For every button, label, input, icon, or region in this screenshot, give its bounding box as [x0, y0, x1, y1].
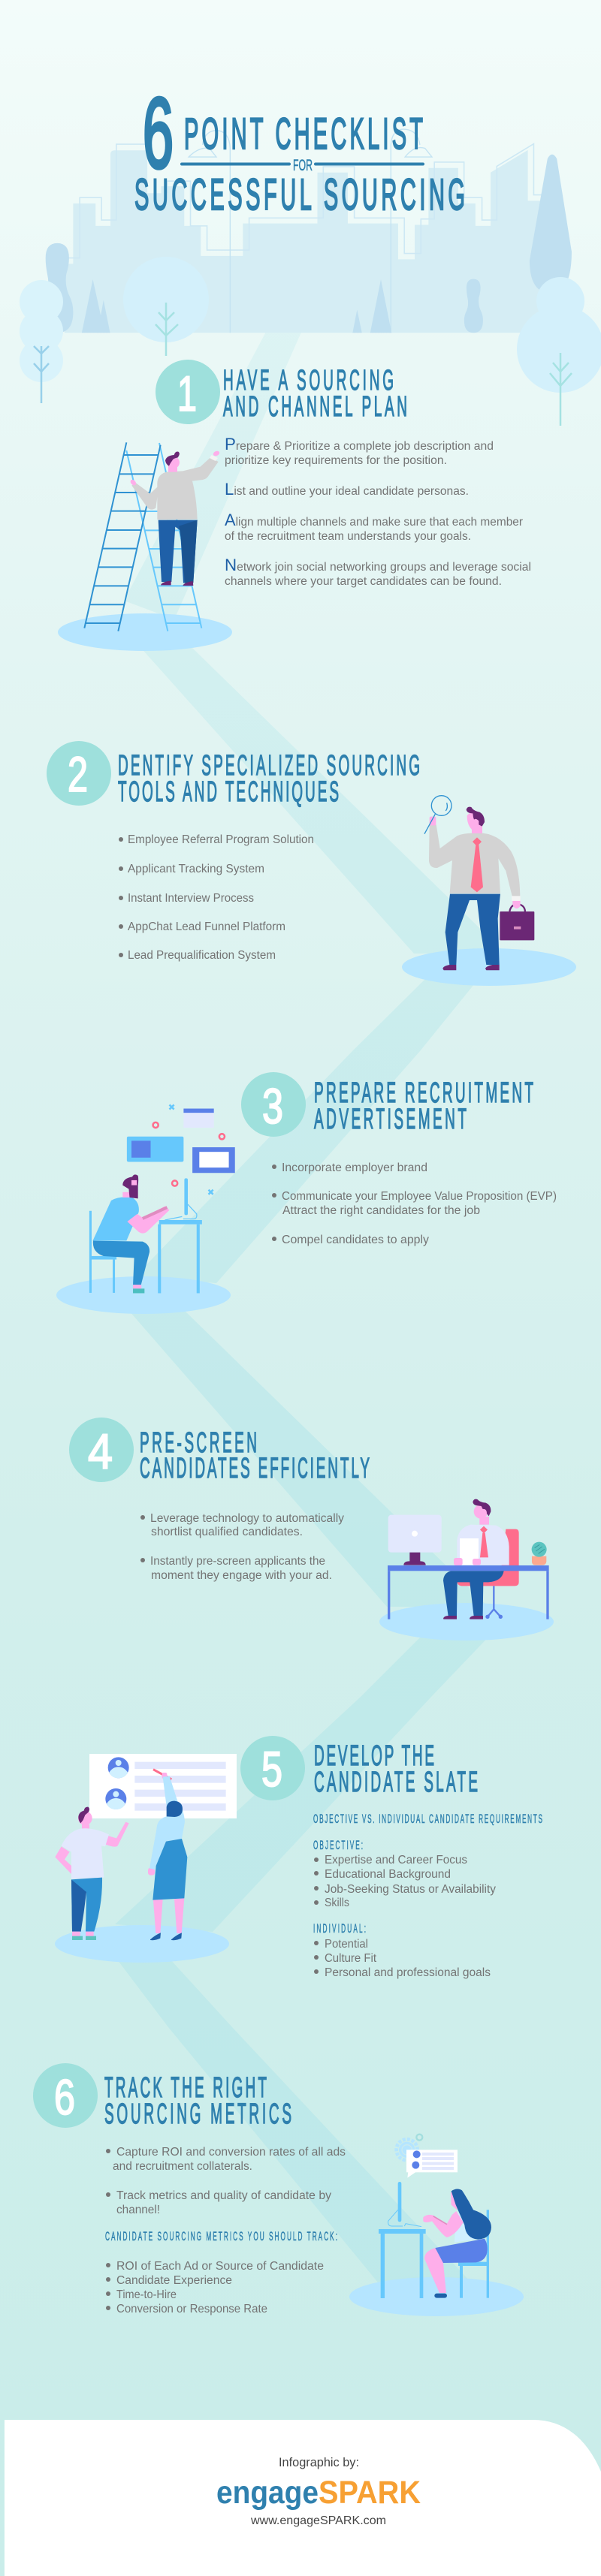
illustration: man on ladder: [84, 442, 220, 631]
title: 6: [143, 78, 174, 189]
section 2: specialized sourcing tools: [47, 741, 576, 986]
heading 6: TRACK THE RIGHT: [104, 2072, 267, 2104]
subheading: requirements: OBJECTIVE VS. INDIVIDUAL CANDIDATE REQUIREMENTS: [313, 1812, 542, 1826]
bullet list 2: Applicant Tracking System: [128, 863, 264, 875]
body text 1: Prepare & Prioritize a complete job description and: [225, 435, 494, 453]
subheading: metrics: CANDIDATE SOURCING METRICS YOU SHOULD TRACK:: [105, 2229, 337, 2243]
heading 5: CANDIDATE SLATE: [314, 1767, 478, 1798]
illustration: man at desk with floating windows: [89, 1104, 235, 1293]
body text 1: Network join social networking groups and leverage social: [225, 556, 531, 574]
section 4: pre-screen candidates: [69, 1418, 554, 1641]
number badge 5: 5: [261, 1741, 282, 1797]
body text 1: List and outline your ideal candidate personas.: [225, 480, 469, 499]
number badge 6: [33, 2063, 98, 2128]
number badge 3: [241, 1072, 306, 1137]
objective list: Job-Seeking Status or Availability: [325, 1883, 496, 1896]
bullet list 2: AppChat Lead Funnel Platform: [128, 920, 285, 933]
logo: engageSPARK: SPARK: [319, 2475, 421, 2511]
bullet text 6: channel!: [116, 2204, 160, 2216]
heading 4: PRE-SCREEN: [140, 1427, 257, 1459]
bullet list 4: moment they engage with your ad.: [151, 1569, 332, 1582]
section 1: sourcing and channel plan: [58, 360, 531, 651]
heading 5: DEVELOP THE: [314, 1740, 434, 1772]
number badge 2: [47, 741, 111, 806]
illustration: man at office desk: [388, 1499, 549, 1619]
metrics list: Conversion or Response Rate: [116, 2303, 267, 2315]
body text 1: channels where your target candidates can be found.: [225, 575, 502, 588]
illustration: man with magnifier: [424, 796, 534, 970]
heading 3: ADVERTISEMENT: [314, 1104, 467, 1135]
section 5: candidate slate: [55, 1736, 542, 1979]
foreground trees: [20, 257, 601, 426]
heading 2: DENTIFY SPECIALIZED SOURCING: [118, 750, 420, 782]
bullet list 4: Instantly pre-screen applicants the: [150, 1555, 325, 1568]
bullet text 6: Track metrics and quality of candidate by: [116, 2189, 331, 2202]
heading 6: SOURCING METRICS: [104, 2098, 291, 2130]
individual list: INDIVIDUAL:: [313, 1921, 366, 1936]
heading 3: [314, 1077, 533, 1135]
platform 4: [379, 1603, 554, 1641]
objective list: OBJECTIVE:: [313, 1838, 363, 1852]
platform 2: [402, 948, 576, 986]
metrics list: Candidate Experience: [116, 2274, 232, 2287]
title: POINT CHECKLIST: [184, 109, 423, 158]
heading 4: [140, 1427, 370, 1484]
platform 1: [58, 613, 232, 651]
number badge 2: 2: [68, 746, 88, 802]
metrics list: ROI of Each Ad or Source of Candidate: [116, 2260, 324, 2273]
bullet list 2: [119, 833, 314, 962]
number badge 1: [156, 360, 220, 424]
objective list: [313, 1838, 496, 1909]
bullet list 2: Employee Referral Program Solution: [128, 833, 314, 846]
bullet list 3: Compel candidates to apply: [282, 1234, 429, 1246]
section 6: sourcing metrics: [33, 2063, 524, 2316]
heading 5: [314, 1740, 478, 1798]
bullet list 4: [140, 1512, 344, 1582]
individual list: Potential: [325, 1938, 368, 1951]
objective list: Expertise and Career Focus: [325, 1854, 467, 1866]
bullet list 2: Lead Prequalification System: [128, 949, 276, 962]
number badge 4: [69, 1418, 134, 1482]
city skyline: [42, 129, 572, 333]
heading 2: TOOLS AND TECHNIQUES: [118, 776, 339, 808]
heading 2: [118, 750, 420, 808]
number badge 1: 1: [177, 366, 197, 421]
bullet list 3: Incorporate employer brand: [282, 1161, 427, 1174]
heading 3: PREPARE RECRUITMENT: [314, 1077, 533, 1109]
website url: www.engageSPARK.com: [250, 2514, 386, 2527]
logo: engageSPARK: engage: [216, 2475, 319, 2511]
section 3: recruitment advertisement: [56, 1072, 557, 1314]
bullet list 4: shortlist qualified candidates.: [151, 1526, 303, 1538]
body text 1: of the recruitment team understands your goals.: [225, 530, 471, 543]
bullet text 6: Capture ROI and conversion rates of all ads: [116, 2146, 346, 2159]
bullet list 3: Communicate your Employee Value Proposition (EVP): [282, 1190, 557, 1203]
bullet list 4: Leverage technology to automatically: [150, 1512, 344, 1525]
body text 1: [225, 435, 531, 588]
metrics list: [106, 2260, 324, 2315]
title: SUCCESSFUL SOURCING: [134, 170, 465, 219]
individual list: Personal and professional goals: [325, 1966, 491, 1979]
bullet text 6: and recruitment collaterals.: [113, 2160, 252, 2173]
number badge 6: 6: [54, 2069, 75, 2125]
footer credit: Infographic by:: [279, 2456, 359, 2469]
winding path: [115, 276, 506, 2282]
heading 1: HAVE A SOURCING: [223, 365, 394, 396]
number badge 3: 3: [262, 1078, 283, 1134]
illustration: woman at computer: [379, 2135, 491, 2298]
bullet text 6: [106, 2146, 346, 2216]
heading 6: [104, 2072, 291, 2130]
title: FOR: [293, 157, 313, 174]
platform 3: [56, 1276, 231, 1314]
heading 1: AND CHANNEL PLAN: [223, 391, 407, 423]
platform 6: [349, 2277, 524, 2316]
objective list: Educational Background: [325, 1868, 451, 1881]
number badge 4: 4: [88, 1424, 113, 1479]
number badge 5: [240, 1736, 305, 1800]
metrics list: Time-to-Hire: [116, 2288, 177, 2301]
bullet list 3: Attract the right candidates for the job: [282, 1204, 480, 1217]
title: [134, 78, 465, 219]
body text 1: prioritize key requirements for the position.: [225, 454, 447, 467]
footer panel: [5, 2420, 601, 2576]
platform 5: [55, 1925, 229, 1963]
individual list: [313, 1921, 491, 1979]
individual list: Culture Fit: [325, 1952, 377, 1965]
logo: engageSPARK: [216, 2475, 421, 2511]
bullet list 2: Instant Interview Process: [128, 892, 254, 905]
illustration: two people at candidate board: [55, 1754, 237, 1940]
heading 1: [223, 365, 407, 423]
bullet list 3: [272, 1161, 557, 1246]
objective list: Skills: [325, 1897, 349, 1909]
heading 4: CANDIDATES EFFICIENTLY: [140, 1453, 370, 1484]
body text 1: Align multiple channels and make sure that each member: [225, 511, 523, 529]
